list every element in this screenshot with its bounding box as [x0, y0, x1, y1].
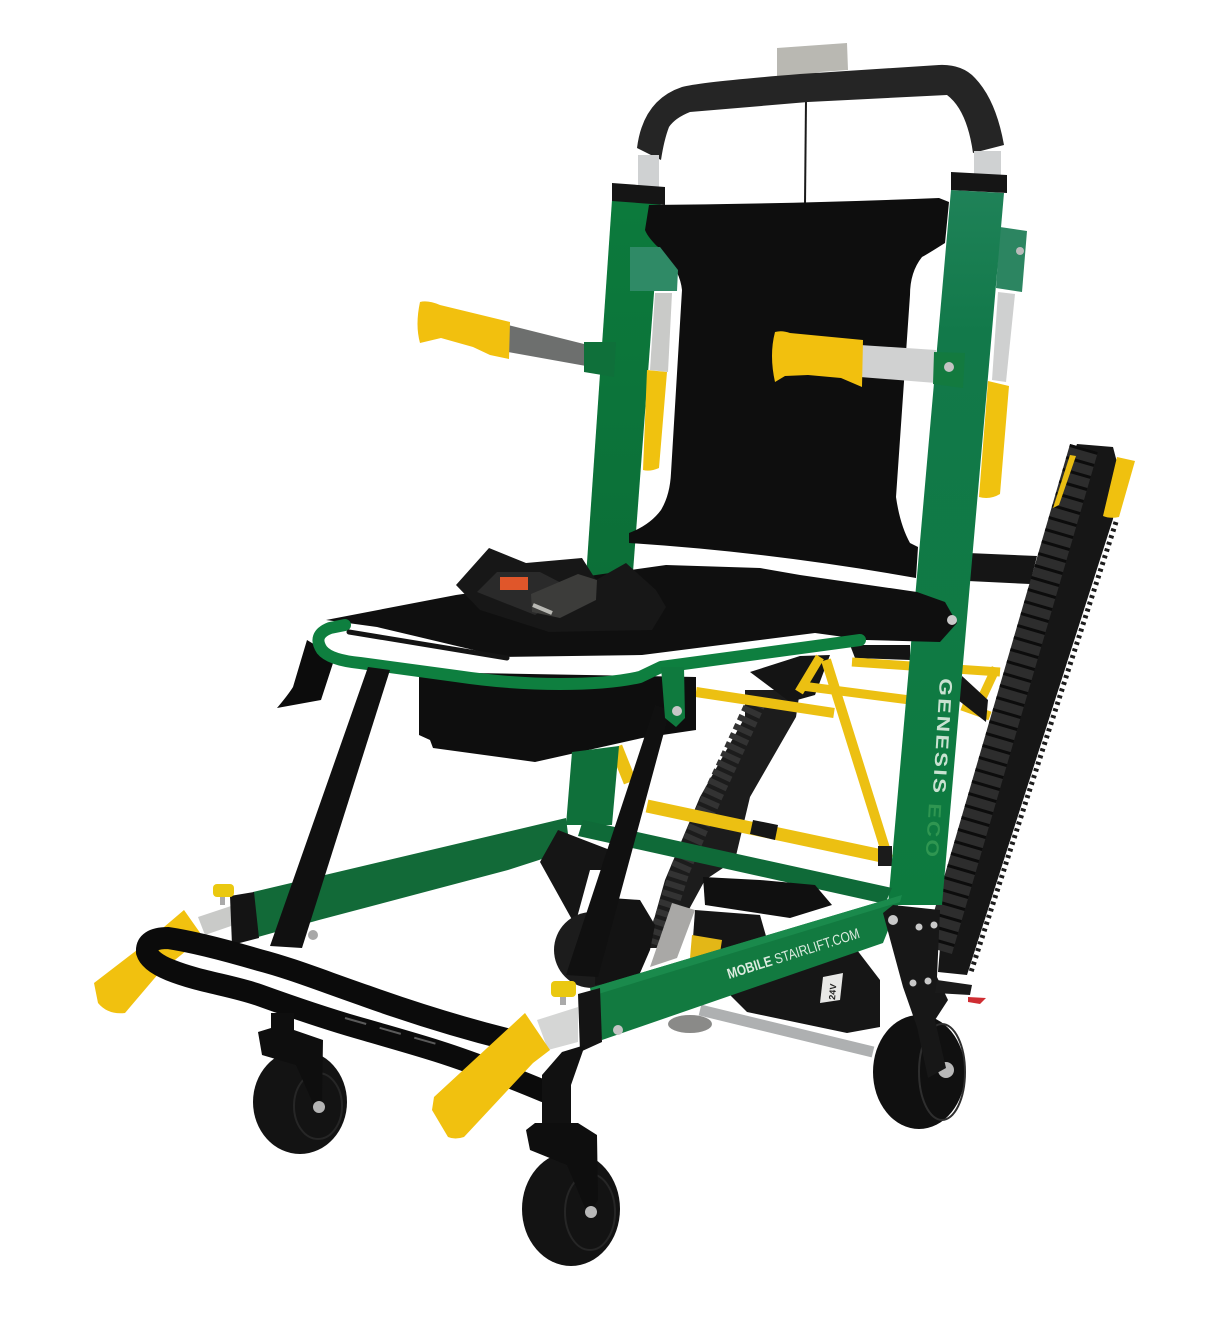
- left upright green: [586, 183, 665, 577]
- handle sleeves: [638, 151, 1001, 187]
- right stair track: [938, 444, 1135, 975]
- left chrome slider: [198, 905, 234, 935]
- bar end cap: [878, 846, 892, 866]
- seat belt buckle: [477, 572, 575, 615]
- rear base rail green: [578, 820, 892, 904]
- upper handle black: [637, 65, 1004, 160]
- yellow rear frame: [616, 657, 1000, 858]
- under seat black bar: [850, 645, 910, 660]
- battery box: [419, 672, 696, 762]
- right collar: [578, 988, 602, 1052]
- front caster stem: [542, 1045, 585, 1125]
- brand text: Genesis Eco: ECO: [921, 803, 944, 860]
- seat belt flap: [456, 548, 666, 632]
- left grip and arm: [418, 301, 616, 377]
- front green rail with branding: MOBILE STAIRLIFT.COM: [725, 926, 862, 983]
- brake lever: [935, 980, 972, 995]
- footrest highlight: [345, 1018, 440, 1045]
- rear wheel: [873, 1015, 965, 1129]
- yellow bar black section: [750, 820, 778, 840]
- rear black diagonal: [958, 676, 988, 722]
- front footrest black tubes: [147, 938, 546, 1092]
- right upright green: [888, 172, 1007, 905]
- middle stair track: [646, 690, 800, 948]
- motor and drive assembly: [554, 877, 880, 1052]
- lower left upright: [566, 746, 619, 825]
- front green rail with branding: [590, 895, 902, 1040]
- seat strap hanging: [277, 640, 335, 708]
- tongue highlight: [533, 605, 552, 613]
- load sensor box: [777, 43, 848, 82]
- buckle red button: [500, 577, 528, 590]
- motor cylinder end: [668, 1015, 712, 1033]
- left foot yellow handle: [94, 910, 203, 1013]
- sensor wire: [805, 100, 806, 204]
- brand text: Genesis Eco: [921, 678, 955, 860]
- back cushion: [629, 198, 949, 578]
- folding mechanism black: [750, 655, 830, 702]
- motor 24V label: [820, 973, 843, 1003]
- yellow knobs: [213, 884, 576, 1005]
- icon: right track yellow cap: [1103, 457, 1135, 518]
- left slide bracket: [630, 247, 678, 471]
- motor silver plate: [650, 903, 695, 967]
- right grip and arm: [772, 331, 965, 388]
- left base rail green: [253, 818, 570, 937]
- right slide bracket: [979, 227, 1027, 498]
- rear crossbar black: [968, 553, 1037, 584]
- front right black leg: [566, 705, 670, 977]
- front caster: [522, 1123, 620, 1266]
- seat cushion and straps: [326, 548, 957, 657]
- icon: track small yellow cap: [1053, 455, 1076, 508]
- left collar: [230, 892, 259, 945]
- left caster: [253, 1013, 347, 1154]
- left black leg: [270, 667, 390, 948]
- right chrome slider: [537, 1007, 578, 1050]
- brand text: Genesis Eco: GENESIS: [928, 678, 955, 796]
- seat tube frame: [318, 625, 860, 684]
- seat front black rail: [349, 632, 507, 658]
- motor 24V label: 24V: [827, 983, 838, 1000]
- motor warning label: [690, 935, 722, 958]
- right foot yellow handle: [432, 1013, 550, 1138]
- motor rod: [700, 1010, 873, 1052]
- buckle metal tongue: [531, 574, 597, 618]
- red brake clip: [968, 997, 986, 1004]
- rear black plate bracket: [883, 905, 948, 1078]
- left leg bracket black plate: [540, 830, 610, 925]
- leg front bracket green: [661, 667, 685, 727]
